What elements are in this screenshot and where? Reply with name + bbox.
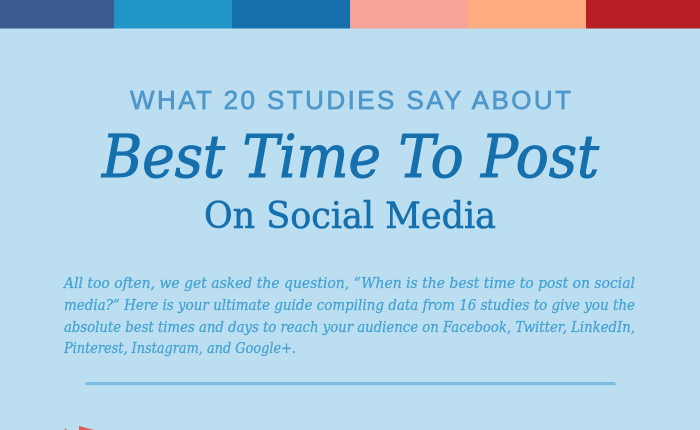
intro paragraph: media?” Here is your ultimate guide compiling data from 16 studies to give you the (64, 298, 635, 314)
colour stripe bar (0, 0, 700, 28)
main title: Best Time To Post (101, 122, 599, 191)
intro paragraph (62, 276, 635, 357)
intro paragraph: absolute best times and days to reach your audience on Facebook, Twitter, LinkedIn, (64, 320, 635, 336)
intro paragraph: Pinterest, Instagram, and Google+. (63, 341, 296, 357)
intro paragraph: All too often, we get asked the question, “When is the best time to post on social (62, 276, 635, 292)
eyebrow heading: WHAT 20 STUDIES SAY ABOUT (130, 85, 571, 115)
icon: red flag tip (64, 426, 94, 430)
subtitle: On Social Media (204, 196, 496, 237)
